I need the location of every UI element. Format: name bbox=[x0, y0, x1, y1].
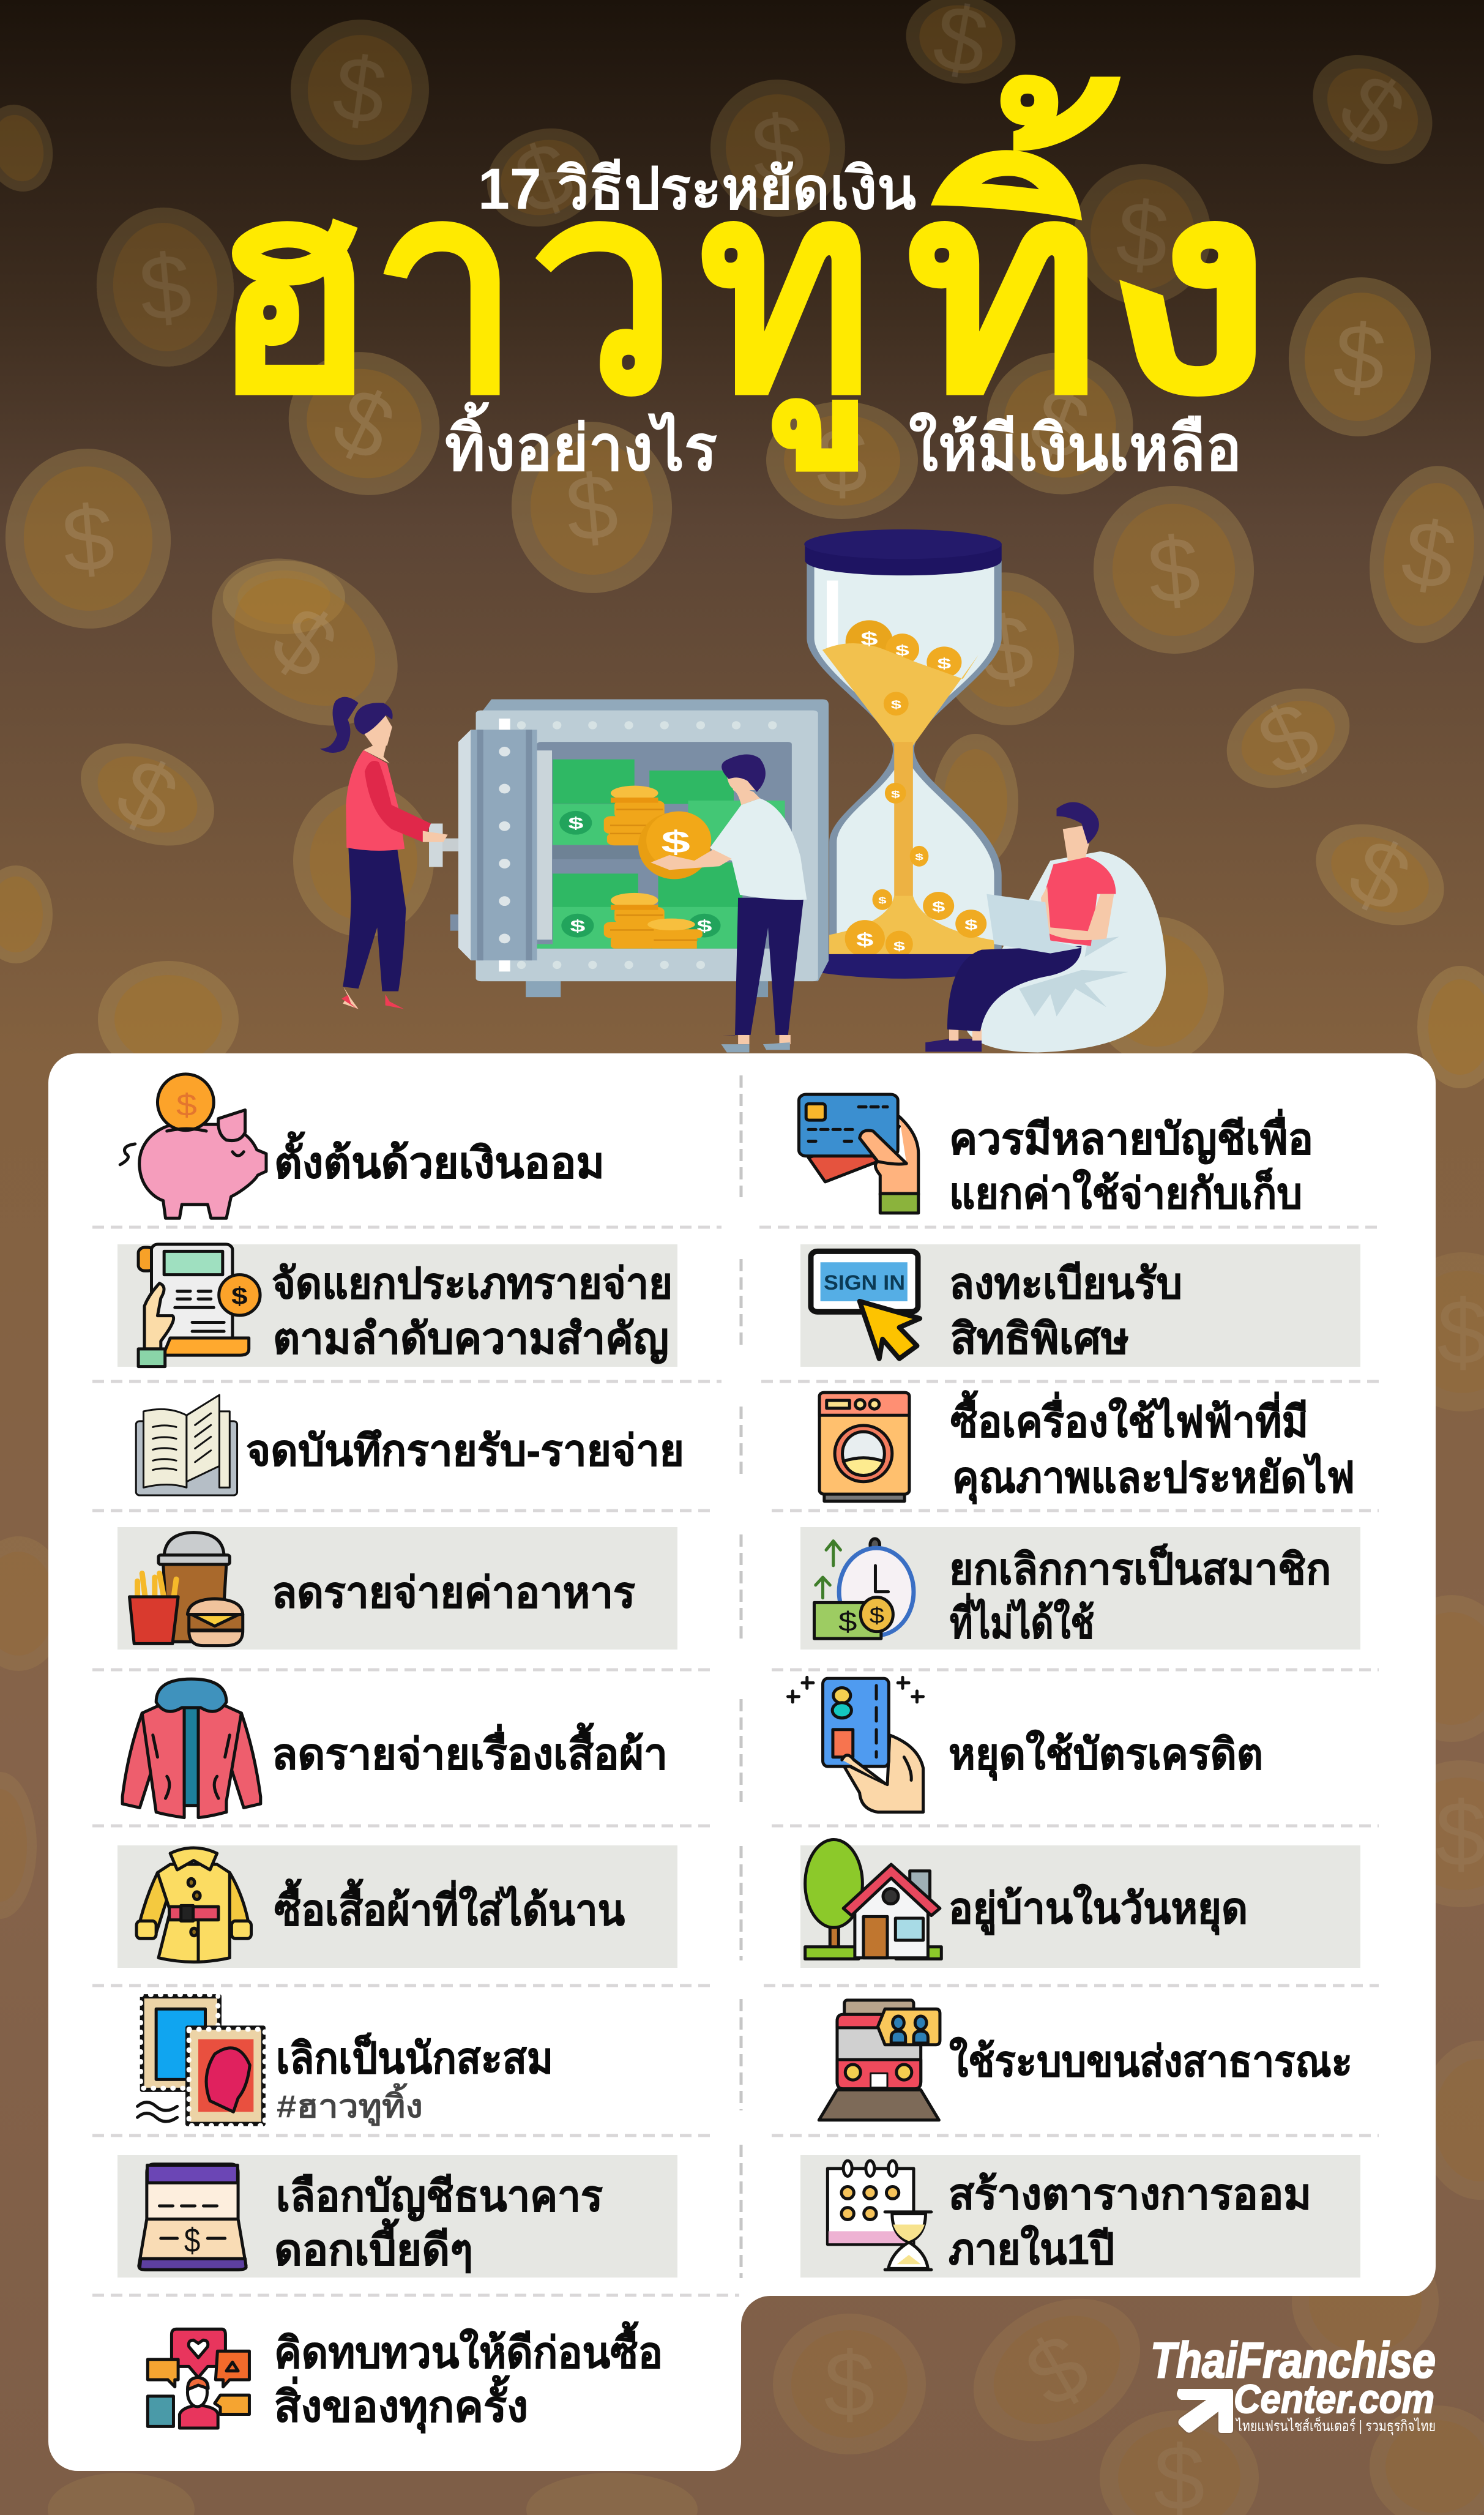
text: แยกค่าใช้จ่ายกับเก็บ bbox=[949, 1167, 1302, 1217]
item: think before buying bbox=[147, 2321, 663, 2434]
hourglass: $ bbox=[891, 789, 900, 800]
text: ภายใน1ปี bbox=[949, 2224, 1114, 2273]
item: multiple accounts bbox=[799, 1094, 1313, 1217]
text: คิดทบทวนให้ดีก่อนซื้อ bbox=[274, 2321, 663, 2377]
text: ตั้งต้นด้วยเงินออม bbox=[274, 1131, 605, 1187]
safe bbox=[429, 699, 829, 997]
logo tagline: ไทยแฟรนไชส์เซ็นเตอร์ | รวมธุรกิจไทย bbox=[1235, 2416, 1436, 2435]
background coins: $ bbox=[1244, 681, 1333, 796]
background coins: $ bbox=[748, 95, 808, 201]
background coins: $ bbox=[1113, 181, 1173, 288]
title: subtitle left: ทิ้งอย่างไร bbox=[445, 402, 717, 484]
logo wordmark: ThaiFranchise bbox=[1150, 2333, 1436, 2388]
item: choose high-interest bank account bbox=[139, 2164, 603, 2274]
hourglass: $ bbox=[856, 929, 873, 950]
text: ลดรายจ่ายเรื่องเสื้อผ้า bbox=[272, 1722, 668, 1778]
background coins: $ bbox=[1335, 817, 1425, 932]
text: จดบันทึกรายรับ-รายจ่าย bbox=[246, 1427, 684, 1474]
text: สิทธิพิเศษ bbox=[950, 1315, 1129, 1362]
text: เลือกบัญชีธนาคาร bbox=[276, 2172, 603, 2222]
background coins: $ bbox=[1395, 499, 1463, 610]
icon: house and tree bbox=[805, 1840, 941, 1959]
icon: bank book: $ bbox=[184, 2221, 200, 2259]
icon: train bbox=[819, 2000, 940, 2120]
hourglass: $ bbox=[932, 899, 945, 915]
item: use public transport bbox=[819, 2000, 1352, 2120]
icon: washing machine bbox=[819, 1392, 909, 1501]
safe: $ bbox=[697, 917, 712, 935]
man with coin: $ bbox=[661, 824, 690, 859]
title: main heading: ว bbox=[529, 124, 678, 453]
text: ยกเลิกการเป็นสมาชิก bbox=[949, 1543, 1331, 1593]
background coins: $ bbox=[974, 594, 1039, 703]
background coins: $ bbox=[103, 737, 192, 852]
item: start with savings bbox=[120, 1074, 605, 1218]
icon: clock and money: $ bbox=[870, 1604, 884, 1628]
hourglass: $ bbox=[895, 642, 909, 659]
panel: white list card bbox=[48, 1053, 1436, 2471]
item: reduce clothing spend bbox=[122, 1679, 668, 1818]
icon: sign in screen bbox=[811, 1251, 920, 1359]
text: ใช้ระบบขนส่งสาธารณะ bbox=[949, 2036, 1352, 2085]
icon: yellow coat bbox=[136, 1848, 252, 1962]
icon: person with speech bubbles bbox=[147, 2329, 249, 2428]
item: stop using credit cards bbox=[788, 1677, 1263, 1812]
item: record income and expenses bbox=[136, 1395, 684, 1495]
title block bbox=[209, 73, 1275, 484]
icon: bank book bbox=[139, 2164, 246, 2270]
hourglass: $ bbox=[893, 940, 905, 954]
icon: open book bbox=[136, 1395, 237, 1495]
text: ดอกเบี้ยดีๆ bbox=[274, 2218, 473, 2274]
icon: red jacket bbox=[122, 1679, 261, 1818]
icon: receipt and coin bbox=[138, 1244, 260, 1367]
background coins: $ bbox=[1009, 2312, 1105, 2427]
text: ตามลำดับความสำคัญ bbox=[273, 1315, 669, 1364]
text: ควรมีหลายบัญชีเพื่อ bbox=[949, 1108, 1313, 1165]
text: ซื้อเครื่องใช้ไฟฟ้าที่มี bbox=[950, 1390, 1308, 1446]
text: หยุดใช้บัตรเครดิต bbox=[949, 1729, 1263, 1781]
item: cancel unused memberships bbox=[814, 1539, 1331, 1647]
item: cut food costs bbox=[130, 1533, 635, 1646]
background coins: $ bbox=[816, 409, 868, 512]
logo: ThaiFranchise Center bbox=[1150, 2333, 1436, 2435]
safe: $ bbox=[570, 917, 585, 935]
background coins: $ bbox=[824, 2333, 875, 2435]
background coins: $ bbox=[1018, 367, 1102, 480]
background coins: $ bbox=[319, 366, 409, 481]
hourglass: $ bbox=[964, 917, 978, 933]
background coins: $ bbox=[1144, 517, 1204, 623]
icon: clock and money: $ bbox=[838, 1606, 857, 1637]
sign in label: SIGN IN bbox=[824, 1271, 905, 1295]
item: register for privileges bbox=[811, 1251, 1182, 1362]
icon: piggy bank: $ bbox=[176, 1087, 197, 1122]
hourglass: $ bbox=[915, 853, 923, 862]
item: separate expense categories bbox=[138, 1244, 673, 1367]
icon: clock and money bbox=[814, 1539, 914, 1639]
title: main heading: ทิ้ bbox=[904, 73, 1124, 453]
woman bbox=[319, 697, 448, 1009]
background coins: $ bbox=[1330, 304, 1390, 410]
item: energy efficient appliances bbox=[819, 1390, 1355, 1504]
logo domain: Center.com bbox=[1234, 2376, 1434, 2421]
hashtag: #ฮาวทูทิ้ง bbox=[277, 2083, 423, 2126]
icon: hand holding cards bbox=[799, 1094, 919, 1213]
text: สิ่งของทุกครั้ง bbox=[274, 2375, 528, 2434]
item: stop collecting bbox=[138, 1995, 553, 2126]
icon: receipt and coin: $ bbox=[231, 1283, 248, 1310]
text: สร้างตารางการออม bbox=[949, 2170, 1311, 2218]
item: stay home on holidays bbox=[805, 1840, 1248, 1959]
text: จัดแยกประเภทรายจ่าย bbox=[272, 1260, 673, 1307]
title: overline: 17 วิธีประหยัดเงิน bbox=[478, 157, 916, 222]
text: อยู่บ้านในวันหยุด bbox=[949, 1883, 1248, 1935]
icon: drink, fries and burger bbox=[130, 1533, 243, 1646]
background coins: $ bbox=[58, 485, 118, 592]
background coins: $ bbox=[1322, 53, 1423, 166]
background coins: $ bbox=[562, 454, 622, 561]
seated man on beanbag bbox=[925, 802, 1166, 1052]
text: ลงทะเบียนรับ bbox=[949, 1260, 1182, 1307]
icon: hand with credit card bbox=[788, 1677, 923, 1812]
hourglass: $ bbox=[860, 628, 878, 649]
illustration: safe, hourglass and people bbox=[319, 529, 1166, 1052]
logo arrow bbox=[1176, 2388, 1234, 2434]
text: ซื้อเสื้อผ้าที่ใส่ได้นาน bbox=[274, 1878, 625, 1934]
safe: $ bbox=[568, 814, 583, 832]
item: create a yearly savings schedule bbox=[827, 2161, 1311, 2273]
background coins: $ bbox=[327, 36, 392, 144]
text: ลดรายจ่ายค่าอาหาร bbox=[272, 1569, 635, 1616]
text: คุณภาพและประหยัดไฟ bbox=[952, 1452, 1355, 1504]
title: main heading: า bbox=[371, 124, 521, 453]
icon: calendar and hourglass bbox=[827, 2161, 931, 2270]
hourglass: $ bbox=[891, 699, 901, 711]
text: เลิกเป็นนักสะสม bbox=[276, 2032, 553, 2082]
title: main heading: ฮ bbox=[209, 124, 376, 453]
background coins: $ bbox=[255, 585, 355, 699]
hourglass: $ bbox=[878, 896, 887, 905]
icon: postage stamps bbox=[138, 1995, 265, 2126]
title: subtitle right: ให้มีเงินเหลือ bbox=[909, 412, 1242, 484]
text: ที่ไม่ได้ใช้ bbox=[950, 1593, 1094, 1647]
title: main heading: ง bbox=[1102, 124, 1275, 453]
background coins: $ bbox=[135, 234, 195, 340]
hourglass bbox=[804, 529, 1002, 979]
title: main heading: ทู bbox=[698, 124, 874, 473]
background coins: $ bbox=[502, 121, 586, 234]
man with coin bbox=[638, 755, 807, 1052]
hourglass: $ bbox=[937, 656, 952, 672]
icon: piggy bank bbox=[120, 1074, 266, 1218]
item: buy long-lasting clothes bbox=[136, 1848, 625, 1962]
